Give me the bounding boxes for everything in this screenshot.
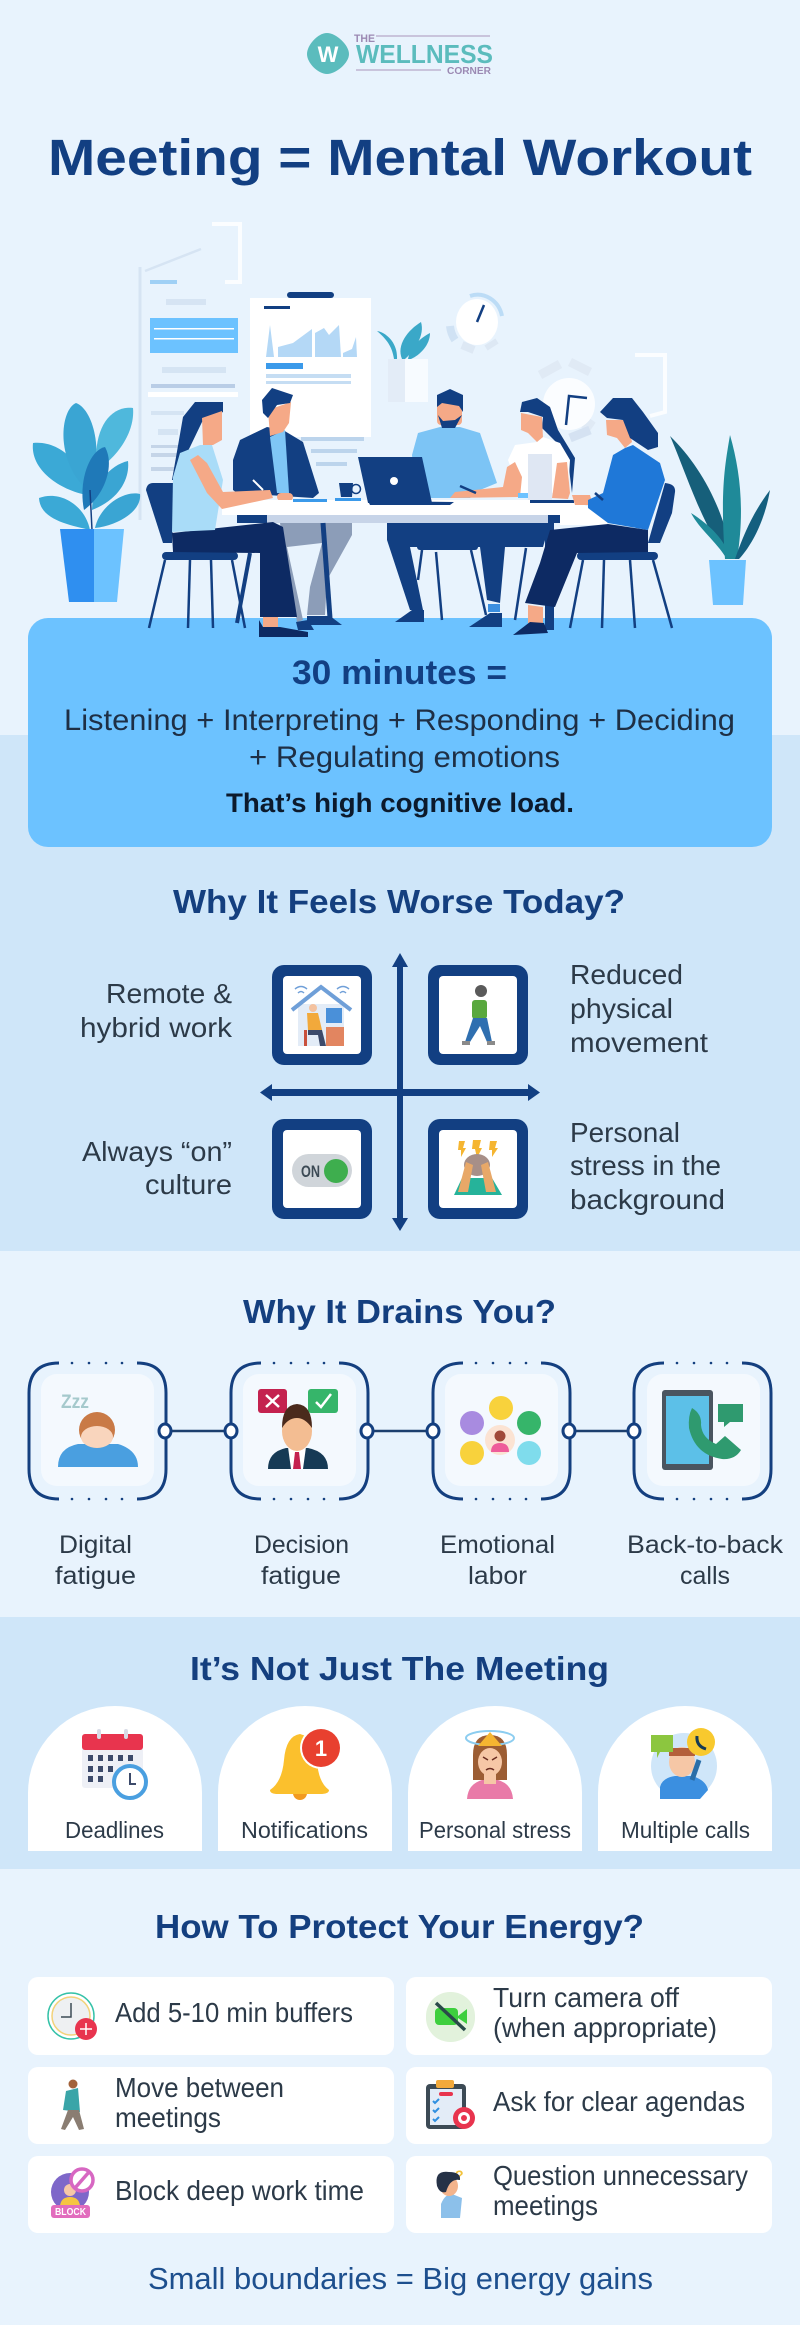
panel: 30 minutes summary: Listening + Interpreting + Responding + Deciding <box>64 704 735 737</box>
panel: 30 minutes summary <box>28 618 772 847</box>
tip: turn camera off: (when appropriate) <box>493 2012 717 2043</box>
left plant <box>33 403 140 602</box>
card: always on culture <box>272 1119 372 1219</box>
card: always on culture: ON <box>301 1162 320 1181</box>
label: emotional labor: Emotional <box>440 1531 555 1559</box>
whiteboard with chart <box>250 292 371 466</box>
text: always on culture <box>82 1136 232 1200</box>
person: bearded man <box>387 389 550 627</box>
card: deadlines: Deadlines <box>65 1817 164 1843</box>
tip: add buffers <box>28 1977 394 2055</box>
tip: question unnecessary meetings: Question unnecessary <box>493 2160 748 2191</box>
card: notifications <box>218 1706 392 1851</box>
tip: question unnecessary meetings: meetings <box>493 2190 598 2221</box>
text: reduced physical movement <box>570 959 708 1058</box>
card: personal stress: Personal stress <box>419 1817 571 1843</box>
tip: block deep work time <box>28 2156 394 2233</box>
tip: question unnecessary meetings <box>406 2156 772 2233</box>
table <box>222 454 607 630</box>
title: Meeting = Mental Workout <box>48 129 752 186</box>
person: woman in white top <box>450 398 575 499</box>
wall plant <box>377 322 430 402</box>
axis arrows <box>260 953 540 1231</box>
heading: it's not just the meeting: It’s Not Just The Meeting <box>190 1650 609 1687</box>
wall clock <box>450 295 502 350</box>
text: personal stress in the background <box>570 1117 725 1215</box>
card: notifications: 1 <box>315 1736 327 1761</box>
card: reduced physical movement <box>428 965 528 1065</box>
card: multiple calls <box>598 1706 772 1851</box>
panel: 30 minutes summary: That’s high cognitive load. <box>226 788 574 818</box>
logo <box>307 33 493 77</box>
logo: WELLNESS <box>356 39 493 69</box>
label: digital fatigue: fatigue <box>55 1562 136 1590</box>
text: personal stress in the background: stress in the <box>570 1150 721 1181</box>
card: digital fatigue: Zzz <box>61 1392 89 1413</box>
tip: block deep work time: BLOCK <box>55 2207 87 2218</box>
text: reduced physical movement: Reduced <box>570 959 683 990</box>
right chair <box>570 483 675 628</box>
label: back-to-back calls <box>627 1531 784 1590</box>
label: digital fatigue: Digital <box>59 1531 132 1559</box>
text: personal stress in the background: background <box>570 1184 725 1215</box>
tip: question unnecessary meetings: ? <box>455 2167 464 2183</box>
text: remote and hybrid work: Remote & <box>106 978 232 1009</box>
tip: turn camera off: Turn camera off <box>493 1982 679 2013</box>
card: decision fatigue <box>225 1362 373 1500</box>
tip: move between meetings: Move between <box>115 2072 284 2103</box>
label: decision fatigue: Decision <box>254 1531 349 1559</box>
text: reduced physical movement: movement <box>570 1027 708 1058</box>
label: decision fatigue: fatigue <box>261 1562 341 1590</box>
logo: W <box>318 42 339 67</box>
tip: ask for clear agendas <box>406 2067 772 2144</box>
second wall clock <box>540 355 665 438</box>
card: back-to-back calls <box>628 1362 771 1500</box>
person: woman right <box>513 398 665 635</box>
text: remote and hybrid work <box>80 978 233 1043</box>
laptop <box>358 457 454 505</box>
label: back-to-back calls: Back-to-back <box>627 1531 784 1559</box>
background document <box>140 224 240 520</box>
tip: add buffers: Add 5-10 min buffers <box>115 1997 353 2028</box>
heading: why it feels worse today: Why It Feels Worse Today? <box>173 883 625 920</box>
card: personal stress <box>428 1119 528 1219</box>
connector lines <box>172 1430 628 1432</box>
tip: ask for clear agendas: Ask for clear agendas <box>493 2086 745 2117</box>
card: emotional labor <box>427 1362 575 1500</box>
panel: 30 minutes summary: 30 minutes = <box>292 654 507 692</box>
person: man in blazer <box>233 388 352 630</box>
label: digital fatigue <box>55 1531 136 1590</box>
centre chair <box>417 544 526 620</box>
footer tagline: Small boundaries = Big energy gains <box>148 2261 653 2296</box>
text: remote and hybrid work: hybrid work <box>80 1012 233 1043</box>
quadrant diagram <box>80 953 725 1231</box>
text: reduced physical movement: physical <box>570 993 673 1024</box>
card: personal stress <box>408 1706 582 1851</box>
person: woman left <box>172 402 308 637</box>
tip: turn camera off <box>406 1977 772 2055</box>
card: multiple calls: Multiple calls <box>621 1817 750 1843</box>
label: back-to-back calls: calls <box>680 1562 730 1590</box>
coffee cup <box>339 483 360 497</box>
logo: THE <box>354 33 375 45</box>
logo: CORNER <box>447 66 492 77</box>
label: emotional labor: labor <box>468 1562 527 1590</box>
tips grid <box>28 1977 772 2233</box>
flow: why it drains you <box>29 1362 784 1590</box>
left chair <box>146 483 250 628</box>
label: decision fatigue <box>254 1531 349 1590</box>
card: deadlines <box>28 1706 202 1851</box>
card: digital fatigue <box>29 1362 171 1500</box>
text: personal stress in the background: Personal <box>570 1117 680 1148</box>
text: always on culture: Always “on” <box>82 1136 232 1167</box>
label: emotional labor <box>440 1531 555 1590</box>
card: remote and hybrid work <box>272 965 372 1065</box>
tip: move between meetings: meetings <box>115 2102 221 2133</box>
panel: 30 minutes summary: + Regulating emotions <box>249 741 560 774</box>
tip: move between meetings <box>28 2067 394 2144</box>
heading: how to protect your energy: How To Protect Your Energy? <box>155 1908 644 1945</box>
tip: block deep work time: Block deep work time <box>115 2175 364 2206</box>
illustration: team meeting <box>33 224 770 637</box>
heading: why it drains you: Why It Drains You? <box>243 1293 556 1330</box>
text: always on culture: culture <box>145 1169 232 1200</box>
arch cards <box>28 1706 772 1851</box>
right plant <box>670 435 770 605</box>
card: notifications: Notifications <box>241 1817 368 1843</box>
